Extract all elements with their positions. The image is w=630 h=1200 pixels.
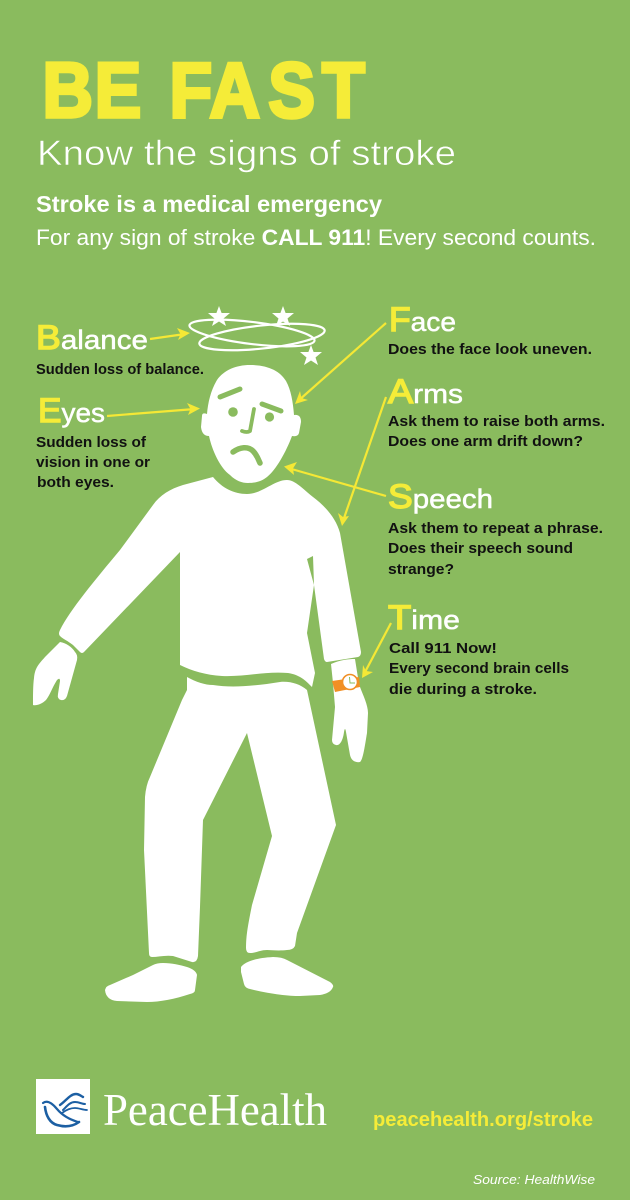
text: balance: Sudden loss of balance. — [36, 362, 204, 378]
text: eyes: vision in one or — [36, 455, 150, 471]
text: time — [389, 641, 569, 698]
text: speech — [388, 521, 603, 578]
left hand — [33, 642, 77, 705]
wordmark: PeaceHealth — [103, 1085, 327, 1135]
arrow: eyes — [107, 403, 200, 416]
text: arms — [388, 414, 605, 450]
text: arms: Ask them to raise both arms. — [388, 414, 605, 430]
text: eyes: Sudden loss of — [36, 435, 146, 451]
text: face: Does the face look uneven. — [388, 342, 592, 358]
intro text: For any sign of stroke CALL 911! Every second counts. — [36, 225, 596, 250]
website link: peacehealth.org/stroke — [373, 1109, 593, 1131]
arrow: face — [295, 323, 386, 404]
face: sad expression — [220, 389, 281, 463]
heading: eyes: Eyes — [38, 392, 105, 430]
text: speech: Does their speech sound — [388, 541, 573, 557]
intro text — [36, 191, 596, 250]
text: speech: strange? — [388, 562, 454, 578]
source credit: Source: HealthWise — [473, 1172, 595, 1187]
arrow: speech — [284, 462, 386, 496]
heading: balance: Balance — [36, 319, 148, 357]
trousers — [144, 677, 336, 962]
head — [201, 365, 301, 483]
text: time: Every second brain cells — [389, 661, 569, 677]
right hand — [331, 659, 368, 762]
shirt — [59, 477, 361, 687]
arrow: time — [362, 623, 391, 678]
arrow: arms — [338, 397, 386, 526]
intro text: Stroke is a medical emergency — [36, 191, 382, 217]
heading: time: Time — [388, 599, 460, 637]
panel: face — [295, 301, 592, 404]
heading: arms: Arms — [388, 373, 463, 411]
text: arms: Does one arm drift down? — [388, 434, 583, 450]
text: speech: Ask them to repeat a phrase. — [388, 521, 603, 537]
text: time: Call 911 Now! — [389, 641, 497, 657]
subtitle: Know the signs of stroke — [37, 134, 456, 173]
logo: PeaceHealth — [36, 1079, 327, 1135]
heading: speech: Speech — [388, 478, 493, 516]
left shoe — [105, 963, 197, 1002]
text: eyes: both eyes. — [37, 475, 114, 491]
panel: eyes — [36, 392, 200, 491]
icon: dizzy orbits and stars — [188, 306, 326, 365]
text: eyes — [36, 435, 150, 491]
right shoe — [241, 957, 333, 996]
panel: balance — [36, 319, 204, 378]
icon: dove logo — [36, 1079, 90, 1134]
text: time: die during a stroke. — [389, 682, 537, 698]
panel: speech — [284, 462, 603, 578]
panel: arms — [338, 373, 605, 526]
panel: time — [362, 599, 569, 698]
figure: person — [33, 365, 368, 1002]
title: BE FAST — [42, 47, 365, 134]
heading: face: Face — [389, 301, 456, 339]
icon: wristwatch — [332, 674, 360, 692]
arrow: balance — [150, 328, 190, 340]
